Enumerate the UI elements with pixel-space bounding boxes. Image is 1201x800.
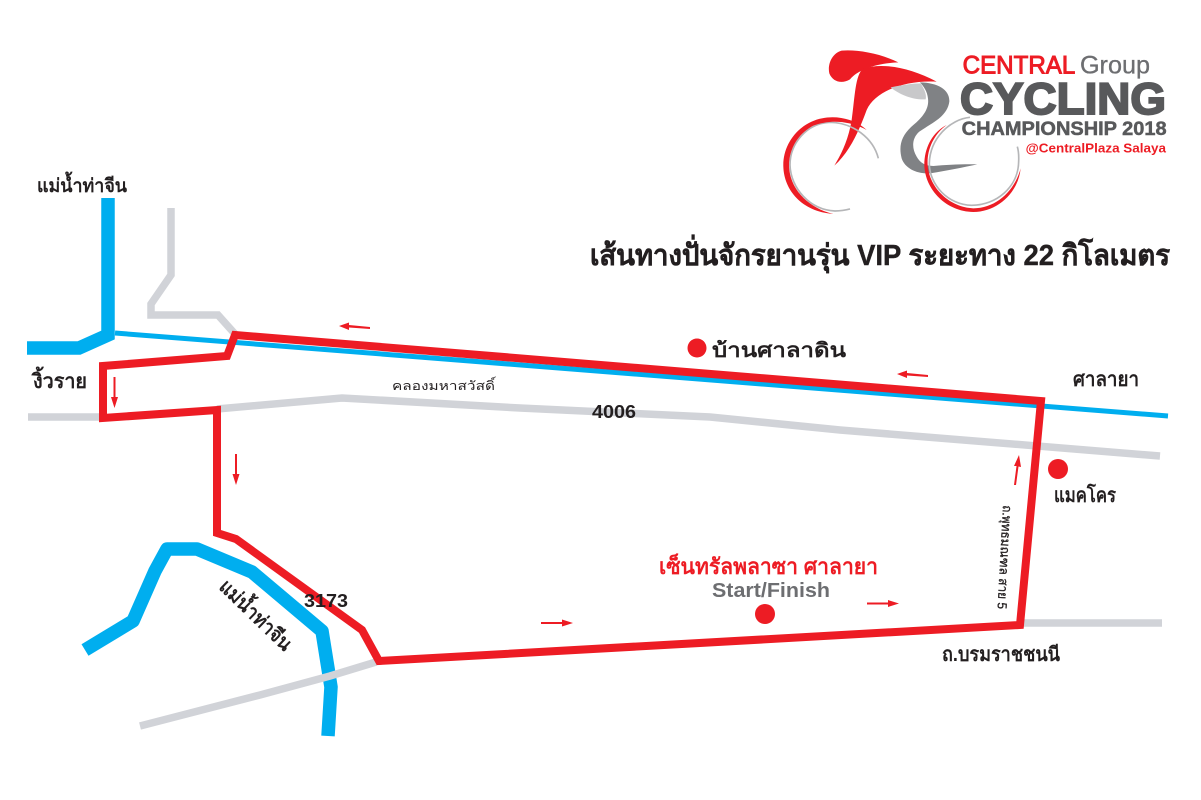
label: Start/Finish: Start/Finish [712,580,830,602]
logo: Central Group Cycling Championship 2018 [783,50,1167,214]
arrow: south on 3173 [232,454,240,485]
icon: cyclist body [834,66,937,166]
label: Phutthamonthon Sai 5: ถ.พุทธมณฑล สาย 5 [994,505,1015,609]
icon: rear wheel [783,117,878,214]
arrow: east on Borommaratchachonnani 2 [867,600,899,607]
title: เส้นทางปั่นจักรยานรุ่น VIP ระยะทาง 22 กิโลเมตร [590,234,1170,273]
label: Khlong Mahasawat: คลองมหาสวัสดิ์ [392,376,497,393]
label: Salaya: ศาลายา [1073,369,1139,391]
direction arrows [111,322,1021,626]
canal: Khlong Mahasawat [115,333,1168,416]
arrow: east on Borommaratchachonnani 1 [541,620,573,626]
label: Makro: แมคโคร [1054,483,1116,507]
arrow: west on top road 1 [339,322,370,330]
river: Tha Chin north [27,198,108,348]
label: Tha Chin river south: แม่น้ำท่าจีน [215,572,300,656]
roads: gray network [28,208,1162,623]
label: Ngio Rai: งิ้วราย [31,366,87,393]
location marker: Central Plaza Salaya [755,604,775,624]
icon: cyclist leg [900,82,977,173]
label: road 4006: 4006 [592,402,636,422]
logo text: venue: @CentralPlaza Salaya [1026,140,1167,155]
logo text: Championship 2018: CHAMPIONSHIP 2018 [962,119,1167,140]
location marker: Makro [1048,459,1068,479]
label: road 3173: 3173 [304,591,348,611]
river: Tha Chin south [85,549,331,736]
location marker: Ban Sala Din [688,338,706,358]
icon: cyclist helmet [829,50,898,82]
icon: front wheel [924,117,1021,212]
label: Borommaratchachonnani Road: ถ.บรมราชชนนี [942,643,1060,666]
arrow: west on top road 2 [897,370,928,378]
arrow: north on Phutthamonthon Sai 5 [1014,455,1021,485]
logo text: Group: Group [1080,51,1150,79]
route: VIP 22 km red loop [103,335,1041,661]
road: southwest branch [140,662,376,726]
logo text: Cycling: CYCLING [960,75,1166,124]
logo text: Central: CENTRAL [963,51,1075,79]
label: Tha Chin river north: แม่น้ำท่าจีน [37,171,127,197]
label: Ban Sala Din: บ้านศาลาดิน [712,339,846,362]
arrow: south at Ngio Rai [111,377,118,408]
label: Central Plaza Salaya: เซ็นทรัลพลาซา ศาลายา [659,552,878,579]
icon: cyclist arm [891,83,926,99]
